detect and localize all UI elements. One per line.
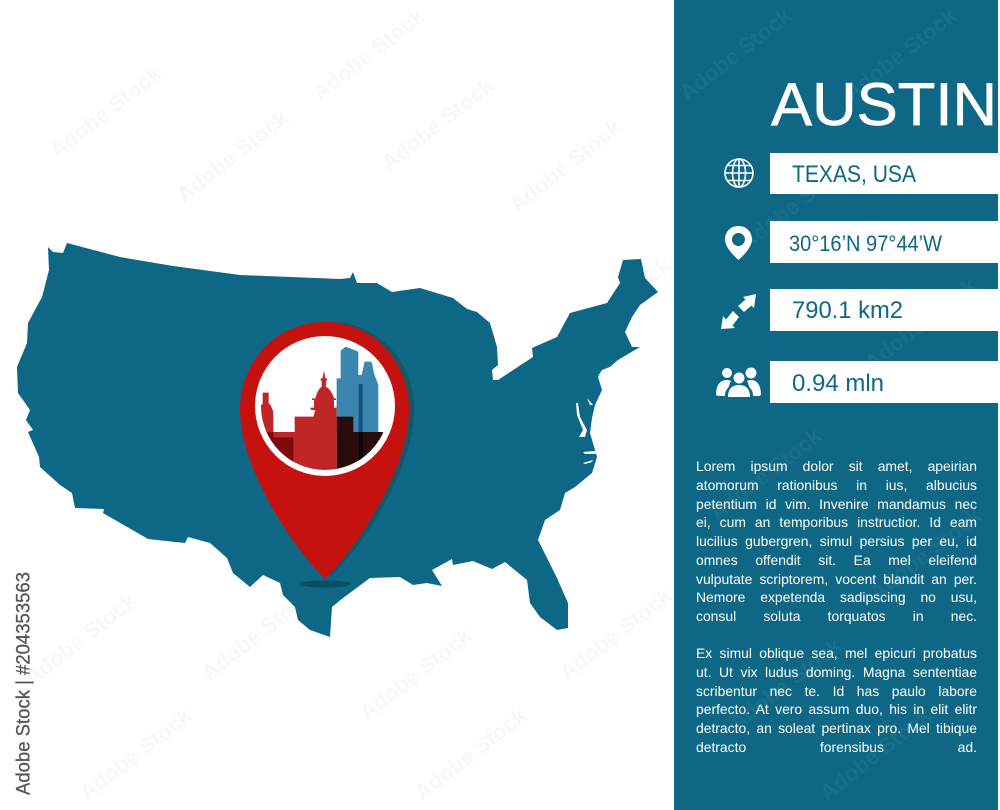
stock attribution label: Adobe Stock | #204353563 — [14, 572, 34, 795]
pin drop shadow — [245, 322, 414, 577]
right information panel: Adobe Stock — [860, 272, 982, 375]
infographic canvas: Adobe Stock — [355, 622, 477, 725]
text block: first paragraph: ei, cum an temporibus instructior. Id eam — [696, 514, 977, 530]
infographic canvas: Adobe Stock — [172, 104, 294, 207]
text block: first paragraph: consul soluta torquatos in nec. — [696, 608, 977, 624]
text block: second paragraph: perfecto. At vero assum duo, his in elit elitr — [696, 701, 977, 717]
icon: diagonal resize arrows — [721, 294, 756, 329]
map pin with Austin skyline — [240, 322, 414, 588]
row: coordinates — [770, 221, 998, 263]
infographic canvas: Adobe Stock — [555, 582, 677, 685]
text block: first paragraph: lucilius gubergren, simul persius per eu, id — [696, 533, 977, 549]
text block: second paragraph: scribentur nec te. Id has paulo labore — [696, 682, 977, 698]
row: area — [770, 289, 998, 331]
text block: second paragraph — [696, 645, 977, 755]
text block: first paragraph — [696, 458, 977, 624]
right information panel: Adobe Stock — [865, 502, 987, 605]
infographic canvas: Adobe Stock — [45, 60, 167, 163]
row: population — [770, 361, 998, 403]
infographic canvas: Adobe Stock — [75, 702, 197, 805]
right information panel: Adobe Stock — [840, 2, 962, 105]
right information panel: Adobe Stock — [705, 422, 827, 525]
skyline — [260, 347, 383, 473]
pin body — [240, 322, 409, 579]
infographic canvas: Adobe Stock — [555, 252, 677, 355]
map: contiguous United States — [17, 243, 658, 637]
pin ground shadow — [299, 580, 351, 588]
right information panel — [674, 0, 998, 810]
row: coordinates: 30°16’N 97°44’W — [789, 231, 942, 256]
right information panel: Adobe Stock — [735, 152, 857, 255]
infographic canvas: Adobe Stock — [410, 702, 532, 805]
text block: first paragraph: Nemore expetenda sadipscing no usu, — [696, 589, 977, 605]
icon: globe — [725, 159, 753, 187]
text block: second paragraph: detracto, an soleat pertinax pro. Mel tibique — [696, 720, 977, 736]
row: population: 0.94 mln — [792, 370, 884, 397]
text block: first paragraph: omnes offendit sit. Ea mel eleifend — [696, 552, 977, 568]
row: state and country — [770, 153, 998, 194]
text block: first paragraph: Lorem ipsum dolor sit amet, apeirian — [696, 458, 977, 474]
text block: second paragraph: Ex simul oblique sea, mel epicuri probatus — [696, 645, 977, 661]
text block: second paragraph: ut. Ut vix ludus doming. Magna sententiae — [696, 664, 977, 680]
title: AUSTIN: AUSTIN — [771, 71, 997, 138]
row: area: 790.1 km2 — [792, 297, 903, 324]
text block: first paragraph: petentium id vim. Invenire mandamus nec — [696, 496, 977, 512]
text block: second paragraph: detracto forensibus ad. — [696, 739, 977, 755]
infographic canvas: Adobe Stock — [505, 114, 627, 217]
text block: first paragraph: vulputate scriptorem, vocent blandit an per. — [696, 570, 977, 586]
right information panel: Adobe Stock — [725, 632, 847, 735]
right information panel: Adobe Stock — [675, 2, 797, 105]
pin white circle — [255, 336, 395, 476]
row: state and country: TEXAS, USA — [792, 161, 916, 188]
icon: location pin — [725, 226, 752, 260]
infographic canvas: Adobe Stock — [308, 2, 430, 105]
text block: first paragraph: atomorum rationibus in ius, albucius — [696, 477, 977, 493]
infographic canvas: Adobe Stock — [197, 582, 319, 685]
icon: people group — [716, 368, 761, 397]
infographic canvas: Adobe Stock — [20, 587, 142, 690]
right information panel: Adobe Stock — [815, 702, 937, 805]
infographic canvas: Adobe Stock — [377, 72, 499, 175]
